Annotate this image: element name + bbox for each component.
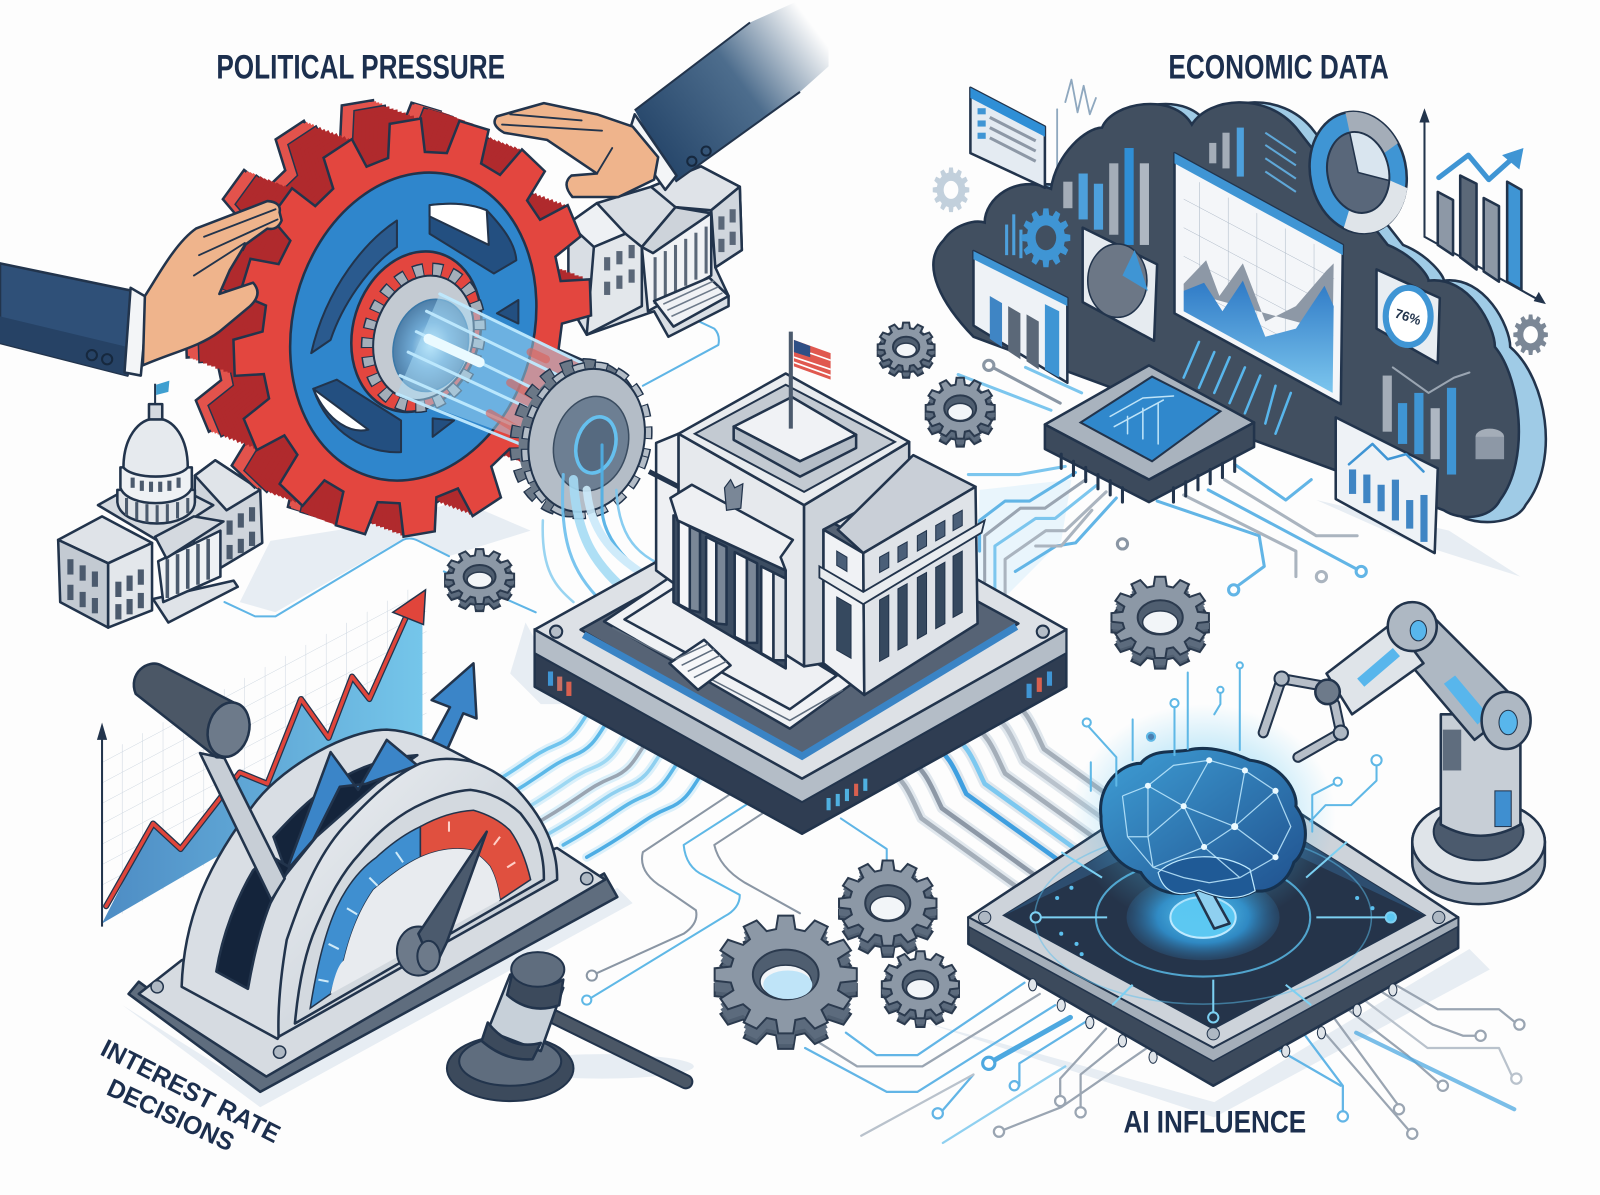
- central building on platform: [535, 332, 1066, 834]
- 76% gauge card: 76%: [1393, 306, 1423, 328]
- gear: above robot: [1111, 577, 1209, 669]
- lever slot: [216, 855, 290, 989]
- robot arm: [1263, 602, 1545, 904]
- capitol building: [58, 381, 262, 628]
- circuit wires: [224, 321, 1524, 1143]
- lower right bars: [1383, 367, 1504, 475]
- gray pinion: [353, 257, 494, 419]
- gear: right of building: [926, 378, 995, 447]
- label: AI influence: AI INFLUENCE: [1123, 1104, 1306, 1140]
- cloud body: [933, 102, 1546, 522]
- LEDs: [548, 671, 1052, 810]
- gear: right of cloud: [1513, 314, 1548, 355]
- robot joints: [1388, 602, 1531, 749]
- panel: economic data cloud: [933, 80, 1546, 553]
- robot column: [1441, 714, 1520, 836]
- gear: large with lens: [715, 916, 857, 1049]
- robot forearm: [1327, 622, 1423, 714]
- small gears: [445, 168, 1548, 669]
- right wing: [819, 455, 985, 695]
- label: interest rate decisions: DECISIONS: [103, 1074, 238, 1157]
- label: political pressure: POLITICAL PRESSURE: [216, 49, 505, 87]
- hand: right: [495, 0, 829, 197]
- red hub: [332, 235, 501, 428]
- wires: platform to AI board: [886, 698, 1146, 892]
- white house building behind gear: [568, 166, 742, 337]
- gauge ring: [295, 790, 544, 1024]
- needle: [397, 832, 487, 976]
- gear: near flag: [878, 323, 935, 378]
- gear: right: [882, 951, 959, 1027]
- hand: left: [0, 201, 282, 376]
- cloud gear icon: [1022, 208, 1070, 267]
- robot base: [1412, 800, 1545, 904]
- blue stream: [543, 445, 658, 602]
- cloud background bars: [1005, 128, 1296, 267]
- portico with columns: [649, 471, 793, 668]
- wires: chip connections: [958, 360, 1366, 622]
- lever base plate: [129, 848, 617, 1092]
- arch opening: [273, 755, 417, 874]
- portico: [153, 516, 238, 622]
- faint signal wave: [1057, 80, 1096, 184]
- blue arrows within arch: [287, 740, 417, 870]
- wires: lever terminals: [582, 788, 800, 1005]
- gear: faded: [933, 168, 969, 212]
- pie card: [1083, 228, 1157, 341]
- ring windows: [311, 204, 518, 452]
- capitol dome: [117, 381, 195, 524]
- label: interest rate decisions: INTEREST RATE: [96, 1035, 284, 1149]
- columns: [679, 520, 786, 660]
- big chart window: [1174, 153, 1343, 404]
- red gear extrusion: [135, 56, 638, 580]
- wires: political side links: [224, 321, 887, 878]
- line chart with grid: [97, 580, 427, 927]
- wires: AI board lower right: [1276, 983, 1524, 1139]
- energy beams: [397, 294, 583, 445]
- donut chart: [1299, 103, 1418, 243]
- board body: [968, 756, 1458, 1086]
- roof: [679, 374, 909, 505]
- gear: left of platform: [445, 549, 514, 611]
- small gears: lower cluster: [715, 860, 959, 1049]
- stage and stairs: [604, 571, 852, 729]
- wires: platform to lever: [474, 704, 709, 857]
- eagle ornament: [724, 480, 743, 510]
- back left wing: [656, 434, 679, 587]
- robot upper arm: [1388, 612, 1520, 740]
- blue ring: [257, 145, 570, 509]
- glowing rings: [1031, 831, 1396, 1022]
- red gear face: [183, 74, 641, 581]
- panel: AI board: [968, 662, 1458, 1086]
- ground shadows: [122, 500, 1520, 1117]
- blue up arrow: [421, 663, 477, 760]
- small chart card: [973, 251, 1067, 383]
- list card: [970, 88, 1045, 188]
- robot claw: [1263, 671, 1348, 757]
- bar chart with arrow: [1419, 108, 1546, 304]
- lower chart card: [1336, 417, 1438, 553]
- right wing: [194, 460, 262, 567]
- panel: interest rate lever: [97, 580, 686, 1101]
- brain: [1070, 704, 1336, 929]
- gauge face: [310, 810, 531, 1008]
- lever handle: [134, 664, 285, 900]
- platform: [535, 481, 1066, 834]
- arch front: [278, 759, 557, 1037]
- red gear: [135, 56, 641, 581]
- main block walls: [679, 434, 909, 666]
- 76% gauge card: [1377, 269, 1440, 363]
- cloud circuit lines: [1184, 342, 1291, 434]
- microchip: [1045, 365, 1254, 502]
- gear: upper: [839, 860, 936, 957]
- label: economic data: ECONOMIC DATA: [1168, 49, 1389, 87]
- flag: [791, 332, 831, 429]
- left wing: [58, 516, 152, 628]
- brain signal lines: [1083, 662, 1382, 832]
- wires: AI board lower left: [805, 983, 1147, 1143]
- arch back: [182, 730, 480, 1039]
- transfer gear with blue stream: [501, 351, 662, 602]
- center terrace: [98, 475, 213, 541]
- gavel: [447, 952, 686, 1101]
